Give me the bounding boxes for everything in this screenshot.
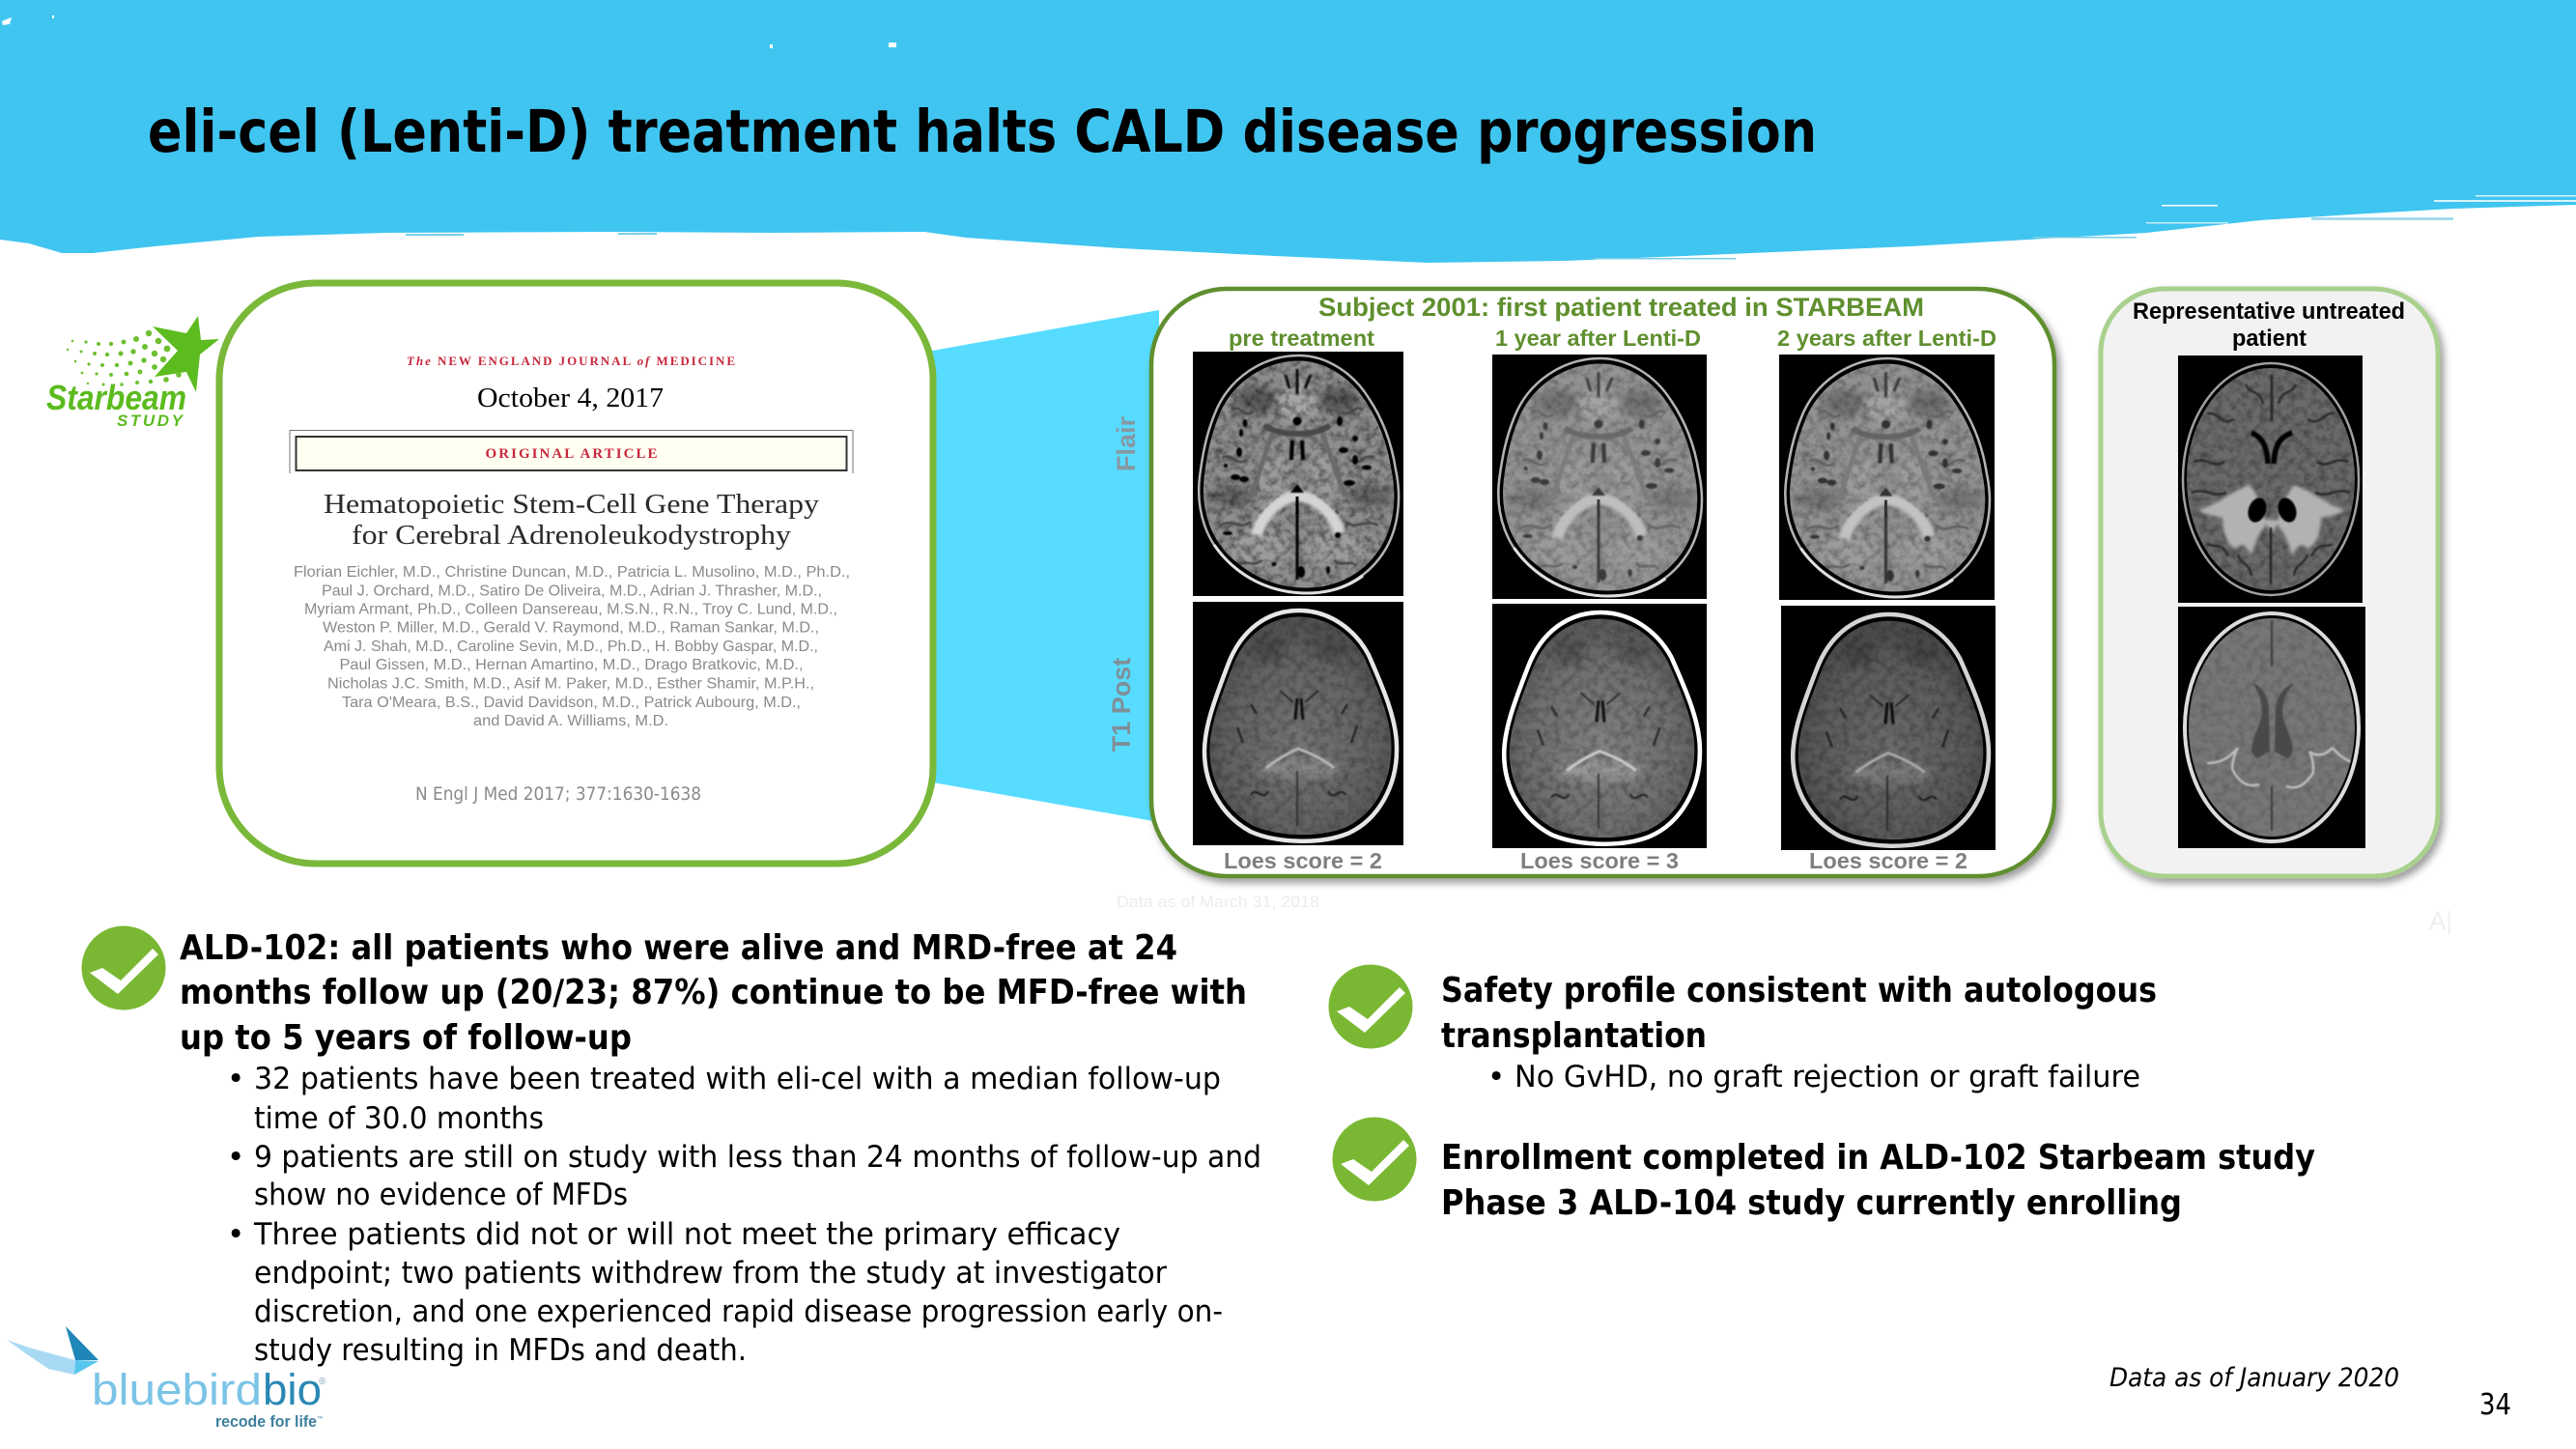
check icon: enrollment (1333, 1117, 1416, 1202)
safety bullet: • (1487, 1060, 1505, 1094)
check icon: safety (1329, 964, 1412, 1049)
panel: NEJM article (219, 283, 933, 864)
supporting bullets: 9 patients are still on study with less than 24 months of follow-up and (254, 1140, 1261, 1175)
supporting bullets: discretion, and one experienced rapid disease progression early on- (254, 1294, 1223, 1329)
text block: enrollment: Phase 3 ALD-104 study currently enrolling (1441, 1183, 2182, 1223)
authors: and David A. Williams, M.D. (473, 713, 668, 729)
MRI: T1 pre treatment (1193, 602, 1403, 845)
panel heading: Representative untreated (2133, 298, 2405, 325)
article title: Hematopoietic Stem-Cell Gene Therapy (324, 489, 820, 520)
supporting bullets: show no evidence of MFDs (254, 1178, 628, 1212)
text block: safety profile (1441, 971, 2157, 1094)
key message (180, 928, 1247, 1058)
logo: bluebird bio: bluebird (92, 1365, 262, 1414)
panel: representative untreated patient (2101, 289, 2438, 876)
column heading: 2 years: 2 years after Lenti-D (1777, 326, 1996, 351)
column heading: 1 year: 1 year after Lenti-D (1495, 326, 1701, 351)
key message: ALD-102: all patients who were alive and MRD-free at 24 (180, 928, 1177, 968)
authors: Nicholas J.C. Smith, M.D., Asif M. Paker, M.D., Esther Shamir, M.P.H., (327, 676, 814, 692)
MRI: T1 1 year (1492, 604, 1707, 848)
MRI: T1 2 years (1781, 606, 1996, 850)
label: Flair: Flair (1112, 416, 1141, 471)
panel heading (2133, 298, 2405, 352)
supporting bullets: endpoint; two patients withdrew from the study at investigator (254, 1256, 1167, 1291)
MRI: untreated T1 (2178, 607, 2365, 848)
check icon: ALD-102 (81, 925, 166, 1010)
authors: Ami J. Shah, M.D., Caroline Sevin, M.D., Ph.D., H. Bobby Gaspar, M.D., (324, 639, 818, 655)
logo: bluebird bio (7, 1326, 326, 1431)
citation: N Engl J Med 2017; 377:1630-1638 (415, 783, 701, 805)
data cutoff note: Data as of January 2020 (2109, 1363, 2399, 1393)
authors: Tara O'Meara, B.S., David Davidson, M.D., Patrick Aubourg, M.D., (342, 695, 801, 711)
safety bullet: No GvHD, no graft rejection or graft failure (1514, 1060, 2140, 1094)
authors: Weston P. Miller, M.D., Gerald V. Raymond, M.D., Raman Sankar, M.D., (323, 620, 819, 636)
supporting bullets: • (227, 1217, 244, 1252)
logo: bluebird bio: ® (319, 1377, 326, 1387)
text block: enrollment (1441, 1138, 2315, 1223)
panel heading: patient (2232, 326, 2307, 352)
text block: ALD-102 results (180, 928, 1261, 1368)
Loes score pre treatment: Loes score = 2 (1224, 848, 1382, 873)
logo: Starbeam study: Starbeam (46, 378, 186, 417)
key message: months follow up (20/23; 87%) continue to be MFD-free with (180, 973, 1247, 1012)
text block: enrollment: Enrollment completed in ALD-102 Starbeam study (1441, 1138, 2315, 1178)
journal name: The NEW ENGLAND JOURNAL of MEDICINE (407, 354, 735, 368)
authors: Paul Gissen, M.D., Hernan Amartino, M.D., Drago Bratkovic, M.D., (340, 657, 804, 673)
key message: up to 5 years of follow-up (180, 1018, 632, 1058)
safety message: Safety profile consistent with autologous (1441, 971, 2157, 1010)
panel heading: Subject 2001: first patient treated in STARBEAM (1318, 293, 1924, 322)
logo: Starbeam study (46, 316, 219, 430)
column heading: pre treatment: pre treatment (1229, 326, 1374, 351)
authors: Myriam Armant, Ph.D., Colleen Dansereau, M.S.N., R.N., Troy C. Lund, M.D., (304, 601, 837, 618)
supporting bullets: Three patients did not or will not meet the primary efficacy (253, 1217, 1120, 1252)
logo: bluebird bio: ™ (317, 1415, 323, 1422)
Loes score 2 years: Loes score = 2 (1809, 848, 1967, 873)
page number: 34 (2479, 1388, 2511, 1422)
MRI: FLAIR 2 years (1779, 355, 1995, 600)
Loes score 1 year: Loes score = 3 (1520, 848, 1679, 873)
publication date: October 4, 2017 (477, 384, 664, 413)
supporting bullets: • (227, 1140, 244, 1175)
MRI: untreated FLAIR (2178, 355, 2363, 603)
connector: cyan callout wedge (927, 310, 1159, 822)
original article banner: ORIGINAL ARTICLE (485, 446, 657, 462)
supporting bullets: 32 patients have been treated with eli-cel with a median follow-up (254, 1062, 1221, 1096)
safety message (1441, 971, 2157, 1056)
title: eli-cel (Lenti-D) treatment halts CALD disease progression (148, 98, 1817, 166)
supporting bullets: • (227, 1062, 244, 1096)
article title: for Cerebral Adrenoleukodystrophy (352, 520, 792, 551)
logo: bluebird bio: bio (263, 1365, 322, 1414)
logo: Starbeam study: STUDY (117, 412, 184, 430)
authors: Florian Eichler, M.D., Christine Duncan, M.D., Patricia L. Musolino, M.D., Ph.D., (294, 564, 850, 581)
panel: Subject 2001 MRI series (1151, 289, 2054, 876)
MRI: FLAIR 1 year (1492, 355, 1707, 599)
header band (0, 0, 2576, 263)
original article banner (290, 431, 853, 473)
MRI: FLAIR pre treatment (1193, 352, 1403, 596)
faint mark right of panels: A| (2429, 906, 2452, 935)
logo: bluebird bio: recode for life (215, 1412, 317, 1431)
safety message: transplantation (1441, 1016, 1707, 1056)
authors (294, 564, 850, 729)
article title (324, 489, 820, 551)
faint footnote under MRI panel: Data as of March 31, 2018 (1117, 893, 1319, 911)
supporting bullets (227, 1062, 1261, 1368)
authors: Paul J. Orchard, M.D., Satiro De Oliveira, M.D., Adrian J. Thrasher, M.D., (322, 583, 822, 599)
supporting bullets: time of 30.0 months (254, 1101, 544, 1136)
label: T1 Post: T1 Post (1107, 658, 1136, 752)
supporting bullets: study resulting in MFDs and death. (254, 1333, 747, 1368)
